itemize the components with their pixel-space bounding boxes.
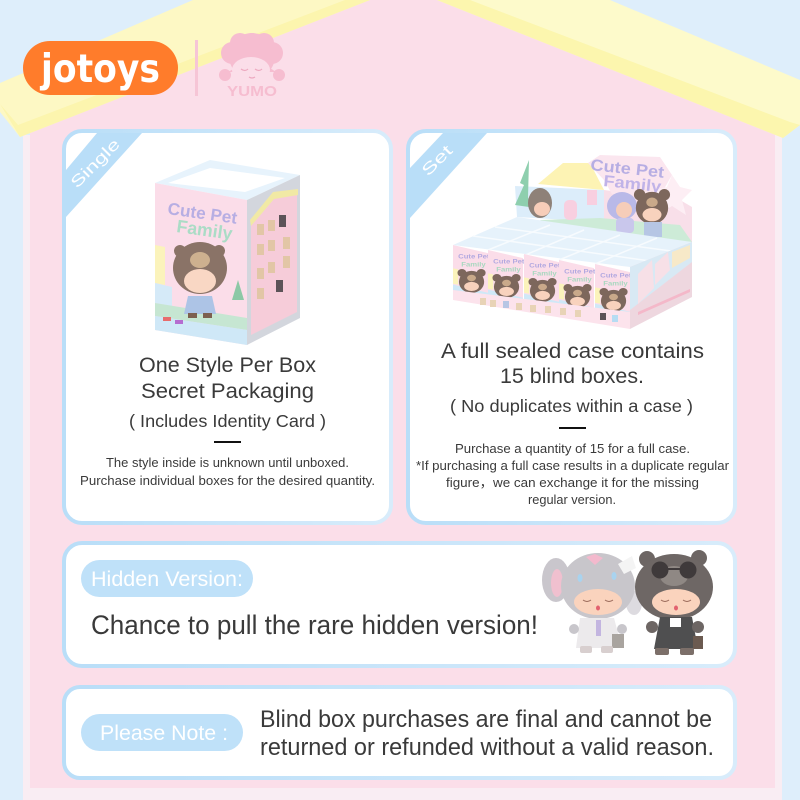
heading: one style per box: Secret Packaging: [141, 380, 314, 403]
box tops: [453, 217, 692, 267]
panel: single: [64, 131, 391, 523]
subheading: no duplicates: ( No duplicates within a case ): [450, 396, 693, 416]
figure: bear hidden: [635, 550, 713, 655]
body text: set: regular version.: [528, 492, 616, 507]
text: purchases are final: Blind box purchases are final and cannot be: [260, 706, 712, 733]
panel: please note: [64, 687, 735, 778]
body text: set: [416, 441, 730, 507]
house roof: yellow left band: [0, 0, 370, 137]
body text: single: [80, 455, 375, 488]
case side: [630, 242, 692, 329]
product: single blind box: Family: [175, 216, 234, 244]
heading: one style per box: [139, 354, 317, 403]
subheading: includes identity card: ( Includes Identity Card ): [129, 411, 326, 431]
ribbon: set: Set: [419, 142, 457, 180]
text: purchases are final: returned or refunded without a valid reason.: [260, 734, 714, 761]
logo: YUMO character: [219, 33, 285, 100]
heading: full sealed case: A full sealed case contains: [441, 340, 704, 363]
body text: set: Purchase a quantity of 15 for a full case.: [455, 441, 690, 456]
product: single blind box: Cute Pet: [166, 199, 239, 228]
text: chance to pull: Chance to pull the rare hidden version!: [91, 610, 538, 640]
front row of boxes: [453, 245, 490, 303]
house roof: yellow right band: [437, 0, 800, 138]
pill: please note: Please Note :: [100, 722, 228, 745]
heading: full sealed case: 15 blind boxes.: [500, 365, 644, 388]
body text: set: figure，we can exchange it for the missing: [446, 475, 699, 490]
ribbon: single: Single: [68, 136, 124, 192]
tray: [453, 290, 630, 329]
pill: hidden version: Hidden Version:: [91, 568, 243, 591]
pill: please note: [81, 714, 243, 751]
product: display case: [453, 155, 692, 329]
display header: Cute Pet: [590, 157, 666, 182]
logo: jotoys: jotoys: [39, 47, 160, 92]
display header: Family: [603, 173, 662, 196]
panel: hidden version: [64, 543, 735, 666]
logo: YUMO character: YUMO: [227, 83, 277, 100]
logo divider: [195, 40, 198, 96]
body text: single: The style inside is unknown until unboxed.: [106, 455, 349, 470]
heading: one style per box: One Style Per Box: [139, 354, 317, 377]
house wall edge: pale strip: [23, 135, 782, 800]
ribbon: single: [66, 133, 142, 217]
ribbon: set: [410, 133, 487, 218]
heading: full sealed case: [441, 340, 704, 388]
body text: set: *If purchasing a full case results in a duplicate regular: [416, 458, 730, 473]
panel: set: [408, 131, 735, 523]
product: single blind box: [155, 160, 300, 345]
pill: hidden version: [81, 560, 253, 597]
display header: [515, 155, 692, 242]
text: purchases are final: [260, 706, 714, 761]
figure: elephant hidden: [542, 553, 642, 653]
body text: single: Purchase individual boxes for the desired quantity.: [80, 473, 375, 488]
